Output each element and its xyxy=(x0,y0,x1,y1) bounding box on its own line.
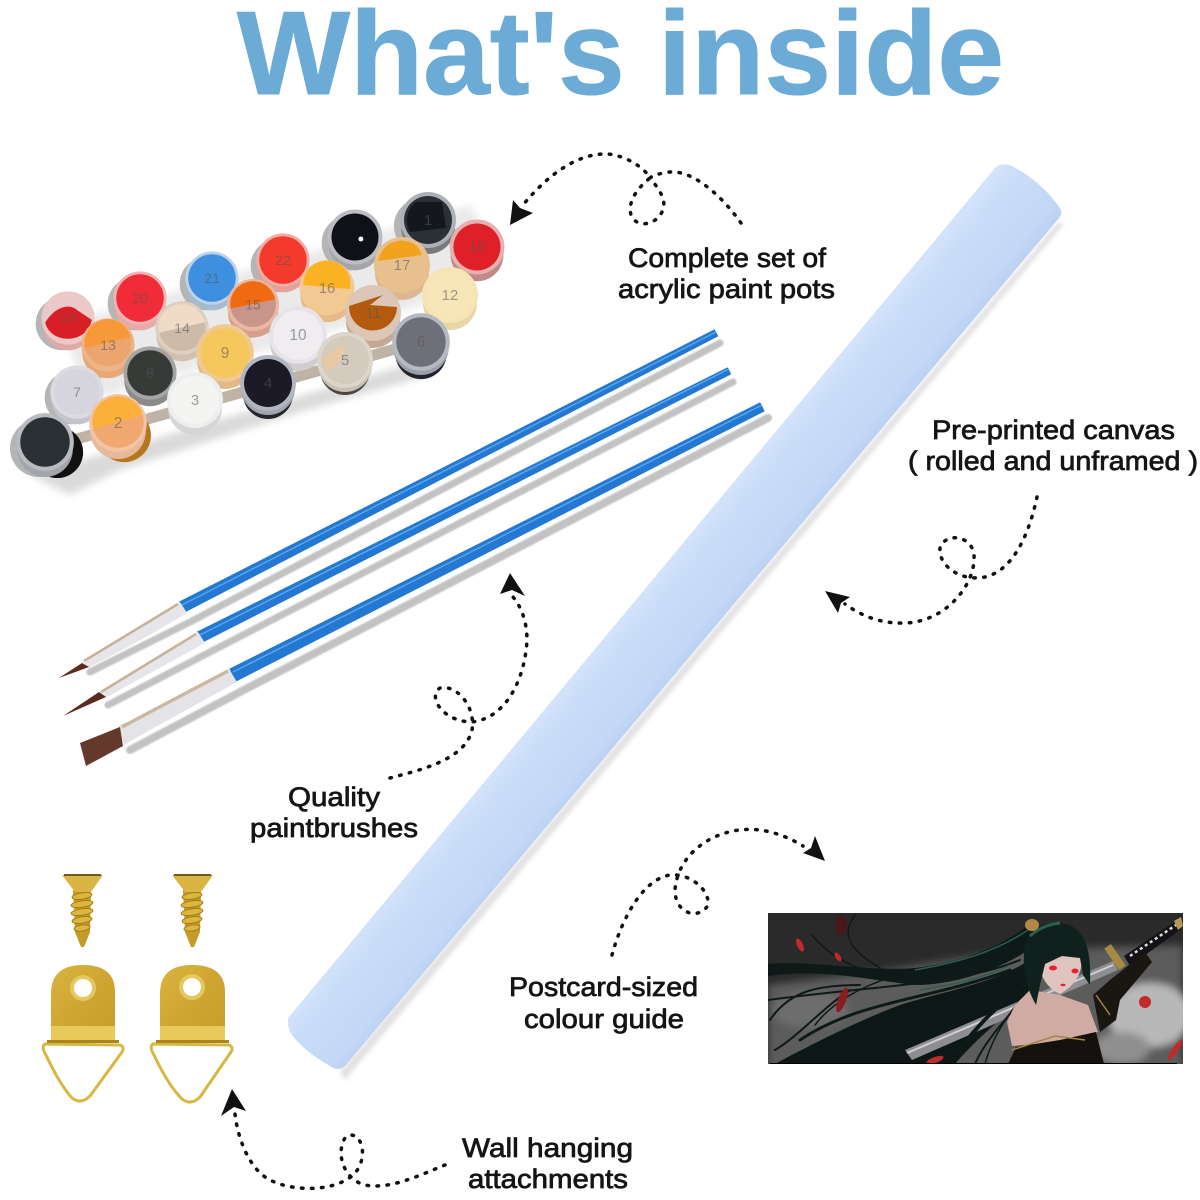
misty grey background xyxy=(768,945,1192,1070)
pot 15 xyxy=(227,279,279,338)
panel: screws and hangers xyxy=(43,874,232,1102)
pot 1: 1 xyxy=(424,212,432,229)
pot 17: 17 xyxy=(394,257,410,274)
head hair xyxy=(1024,923,1090,1005)
hair strands xyxy=(768,915,1030,1064)
eyes and lips xyxy=(1049,966,1078,986)
label: colour guide xyxy=(509,972,698,1034)
pot 10 xyxy=(269,306,327,371)
pot 3 xyxy=(167,372,223,435)
pot 17 xyxy=(374,237,430,300)
pot 11: 11 xyxy=(365,305,381,322)
outfit xyxy=(1008,1032,1104,1064)
pot 12 xyxy=(422,267,478,330)
label: canvas: Pre-printed canvas xyxy=(932,415,1175,445)
pot 8: 8 xyxy=(146,366,154,382)
pot 21 xyxy=(180,251,239,310)
pot 13: 13 xyxy=(100,338,116,354)
red petals xyxy=(794,915,1184,1066)
pot 2 xyxy=(89,394,151,462)
label: hanging attachments: attachments xyxy=(468,1164,628,1194)
pot 19 xyxy=(36,291,95,350)
label: canvas: ( rolled and unframed ) xyxy=(908,446,1198,476)
brush shadows xyxy=(90,343,768,750)
pot 9 xyxy=(196,324,254,389)
brush 1 xyxy=(59,330,718,678)
label: paintbrushes xyxy=(250,782,418,843)
label: paint pots: acrylic paint pots xyxy=(618,274,835,304)
brush 3 xyxy=(80,403,764,766)
pot 1 xyxy=(394,192,456,254)
arrow: canvas xyxy=(825,497,1037,623)
panel: acrylic paint pots xyxy=(10,192,504,495)
pot 15: 15 xyxy=(245,297,261,313)
pot 18 xyxy=(450,220,504,281)
label: hanging attachments xyxy=(462,1133,633,1194)
pot 7 xyxy=(45,365,104,424)
sleeve and shoulder xyxy=(1093,952,1152,1032)
pot 10: 10 xyxy=(289,327,307,344)
pot 16: 16 xyxy=(319,281,335,297)
pot 9: 9 xyxy=(221,345,229,362)
arrow: colour guide xyxy=(612,829,825,955)
pot 12: 12 xyxy=(442,287,458,304)
sword handle xyxy=(1104,917,1183,970)
pot 1 lower xyxy=(10,413,83,478)
hair highlights xyxy=(915,930,1028,990)
label: colour guide: colour guide xyxy=(524,1004,684,1034)
brush 2 xyxy=(63,368,731,716)
arrow: hanging attachments xyxy=(221,1089,445,1188)
label: hanging attachments: Wall hanging xyxy=(462,1133,633,1163)
pot 14: 14 xyxy=(174,321,190,337)
pot 18: 18 xyxy=(469,240,485,256)
hanger 2 xyxy=(151,965,232,1102)
pot 6 xyxy=(392,313,450,379)
pot 13 xyxy=(81,318,135,378)
screw 2 xyxy=(172,874,213,947)
sword blade xyxy=(905,961,1118,1060)
panel: paintbrushes xyxy=(59,330,768,766)
screw 1 xyxy=(62,874,103,947)
hanger 1 xyxy=(43,965,123,1101)
pot 22: 22 xyxy=(275,253,291,269)
face xyxy=(1042,956,1082,994)
pot black xyxy=(322,210,382,270)
pot 20: 20 xyxy=(132,291,148,307)
pot 11 xyxy=(345,285,401,348)
lower hair mass xyxy=(775,960,1030,1064)
pot 3: 3 xyxy=(191,392,199,409)
arrow: paint pots xyxy=(510,154,741,225)
label: paintbrushes: paintbrushes xyxy=(250,813,418,843)
label: colour guide: Postcard-sized xyxy=(509,972,698,1002)
label: paint pots xyxy=(618,243,835,304)
pot 22 xyxy=(251,233,310,292)
panel: canvas roll xyxy=(288,164,1064,1080)
colour guide image xyxy=(768,913,1192,1070)
pot 21: 21 xyxy=(204,271,220,287)
label: paintbrushes: Quality xyxy=(288,782,381,812)
pot 5 xyxy=(317,332,373,395)
upper hair stream xyxy=(768,922,1035,985)
pot 16 xyxy=(300,261,354,322)
pot 8 xyxy=(123,346,177,406)
label: canvas xyxy=(908,415,1198,476)
pot 19: 19 xyxy=(60,311,76,327)
pot 7: 7 xyxy=(73,385,81,401)
skin xyxy=(1007,990,1098,1046)
pot 14 xyxy=(155,301,209,361)
pot 20 xyxy=(108,271,167,330)
label: paint pots: Complete set of xyxy=(628,243,827,273)
hair ornament xyxy=(1025,919,1039,931)
pot 5: 5 xyxy=(341,352,349,369)
pot 4: 4 xyxy=(264,375,272,392)
pot 4 xyxy=(240,355,296,419)
pot 2: 2 xyxy=(114,415,122,432)
pot 6: 6 xyxy=(417,334,425,351)
arrow: paintbrushes xyxy=(390,573,527,778)
